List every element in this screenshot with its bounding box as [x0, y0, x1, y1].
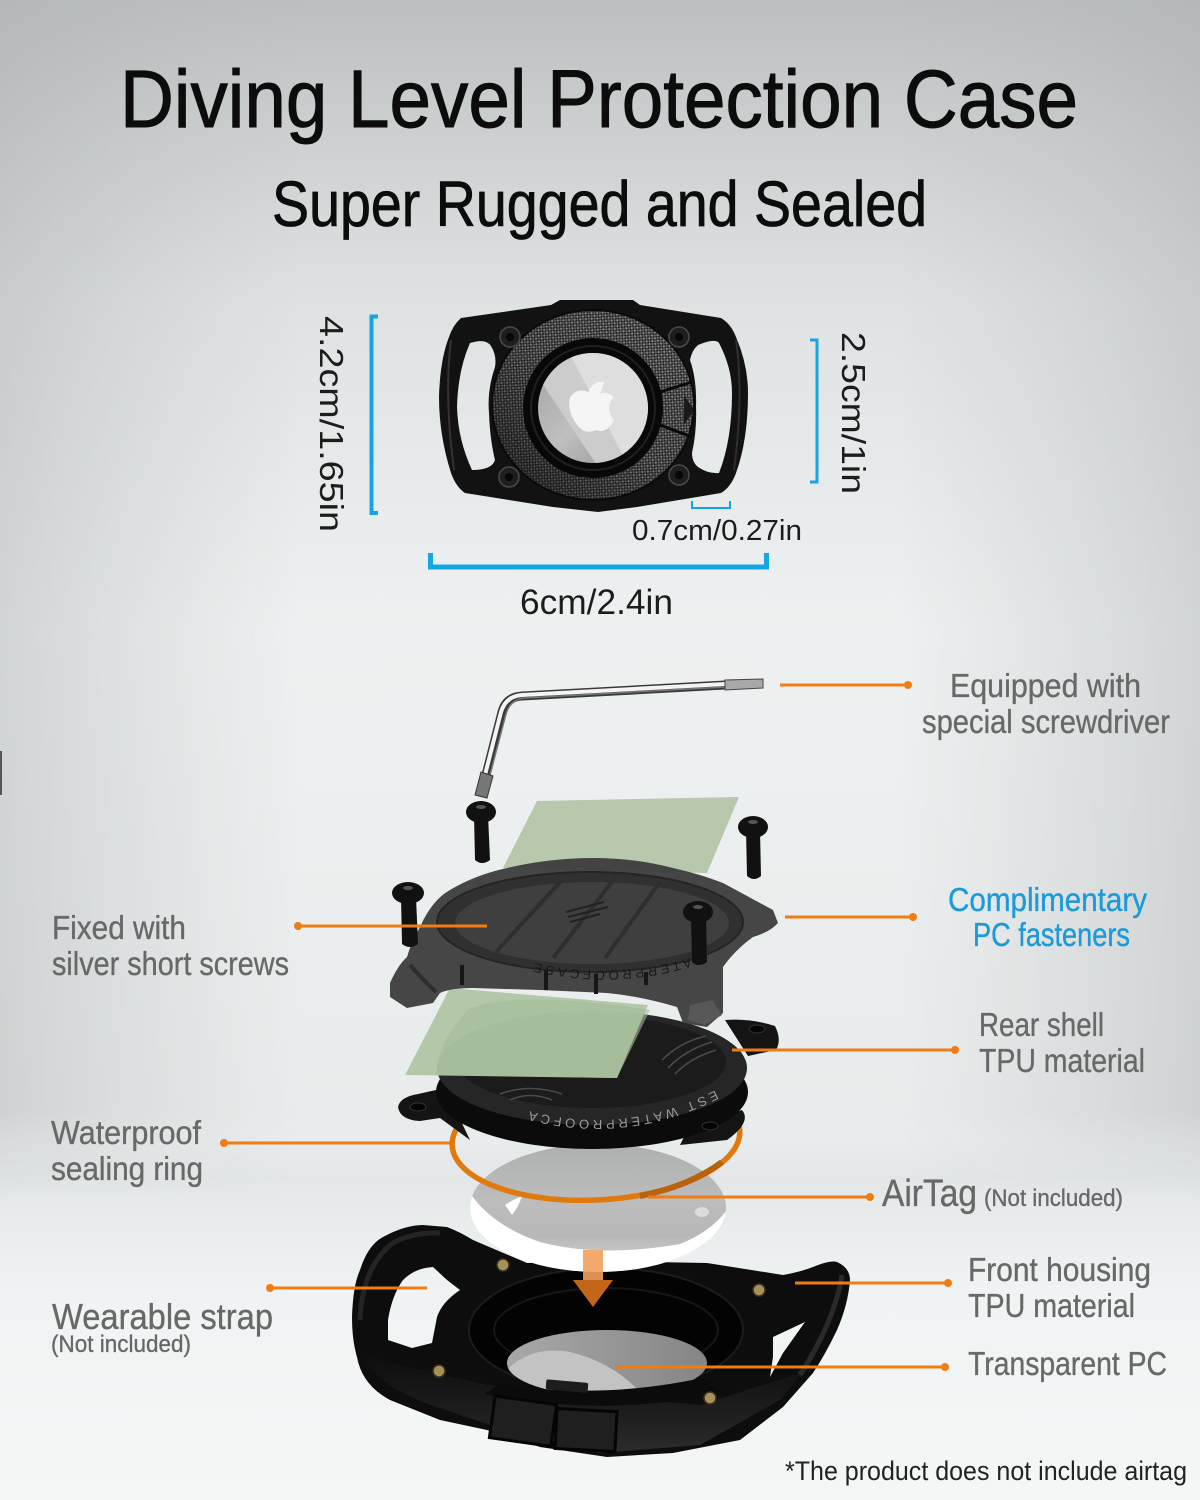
callout: waterproof sealing ring: sealing ring [51, 1150, 203, 1187]
callout: front housing: Front housing [968, 1251, 1151, 1288]
callout: silver short screws: Fixed with [52, 909, 186, 946]
dimension: strap width 0.7cm [632, 501, 802, 547]
dimension: strap width 0.7cm: 0.7cm/0.27in [632, 515, 802, 547]
callout: rear shell [732, 1006, 1145, 1079]
callout: front housing: TPU material [968, 1287, 1135, 1324]
callout: PC fasteners: PC fasteners [973, 916, 1130, 953]
callout: silver short screws [52, 909, 487, 982]
dimension: width 6cm [430, 553, 766, 622]
exploded view: AirTag and sealing ring [449, 1123, 743, 1272]
callout: front housing [795, 1251, 1151, 1324]
callout: waterproof sealing ring [51, 1114, 450, 1187]
callout: rear shell: Rear shell [979, 1006, 1104, 1043]
title: Diving Level Protection Case [120, 54, 1078, 145]
callout: transparent PC [615, 1345, 1167, 1382]
exploded view: rear shell TPU [398, 1014, 779, 1149]
callout: screwdriver: special screwdriver [922, 703, 1170, 740]
dimension: height 4.2cm: 4.2cm/1.65in [313, 316, 350, 532]
dimension: inner height 2.5cm: 2.5cm/1in [835, 332, 872, 494]
callout: rear shell: TPU material [979, 1042, 1145, 1079]
green film: top [503, 797, 739, 873]
callout: transparent PC: Transparent PC [968, 1345, 1167, 1382]
green film: bottom [405, 988, 648, 1078]
exploded view: four screws [392, 801, 768, 965]
callout: silver short screws: silver short screws [52, 945, 289, 982]
callout: AirTag: (Not included) [984, 1185, 1123, 1212]
exploded view: transparent PC fastener: WATERPROOFCASE [534, 958, 708, 980]
dimension: inner height 2.5cm [810, 332, 872, 494]
callout: AirTag [648, 1173, 1123, 1215]
dimension: width 6cm: 6cm/2.4in [520, 583, 673, 622]
exploded view: transparent PC fastener [390, 858, 778, 1027]
top product view: case with AirTag [439, 300, 748, 512]
exploded view: front housing TPU [352, 1225, 850, 1457]
dimension: height 4.2cm [313, 316, 378, 532]
exploded view: screwdriver [475, 679, 763, 798]
callout: screwdriver [780, 667, 1170, 740]
callout: AirTag: AirTag [882, 1173, 977, 1215]
insertion arrow [573, 1250, 613, 1307]
callout: PC fasteners: Complimentary [948, 881, 1147, 918]
callout: wearable strap [51, 1284, 427, 1358]
callout: screwdriver: Equipped with [950, 667, 1141, 704]
callout: wearable strap: (Not included) [51, 1331, 191, 1358]
exploded view: rear shell TPU: EST WATERPROOFCA [530, 1090, 718, 1129]
callout: waterproof sealing ring: Waterproof [51, 1114, 202, 1151]
callout: PC fasteners [785, 881, 1147, 953]
subtitle: Super Rugged and Sealed [272, 168, 927, 240]
callout: wearable strap: Wearable strap [52, 1296, 273, 1337]
